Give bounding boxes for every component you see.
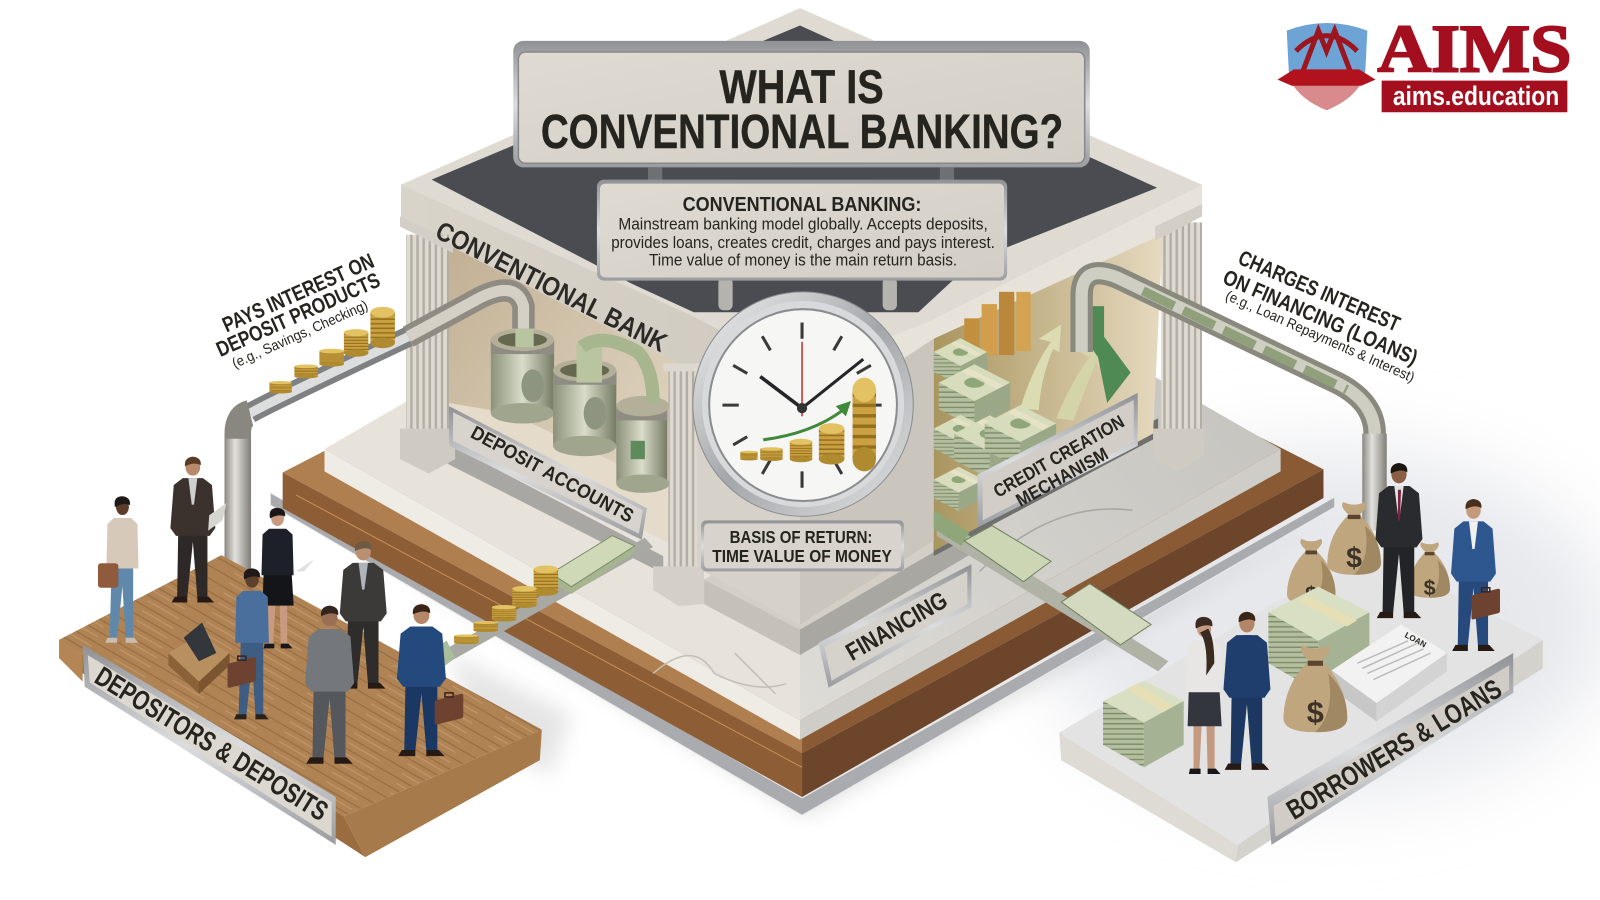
label: conventional bank: CONVENTIONAL BANK xyxy=(431,215,672,358)
title sign: CONVENTIONAL BANKING? xyxy=(541,106,1063,159)
definition sign: provides loans, creates credit, charges and pays interest. xyxy=(611,233,995,252)
clock hands xyxy=(760,342,863,416)
man with burgundy tie xyxy=(1376,463,1422,618)
sign: depositors and deposits xyxy=(83,645,336,845)
caption: pays interest on deposits: (e.g., Savings, Checking) xyxy=(230,298,371,372)
green growth arrow xyxy=(763,401,851,440)
pipe: interest charged on loans xyxy=(1082,273,1387,531)
loan document stack: LOAN xyxy=(1403,631,1428,649)
right conveyor with bills xyxy=(934,510,1168,671)
column right xyxy=(1153,204,1204,471)
growing coin stacks xyxy=(740,378,876,471)
people: borrower pair at back xyxy=(1376,463,1500,651)
definition sign xyxy=(597,180,1007,281)
logo shield xyxy=(1278,23,1376,110)
caption: pays interest on deposits: DEPOSIT PRODUCTS xyxy=(213,268,384,362)
woman with ponytail xyxy=(1186,617,1222,774)
small cash stack xyxy=(1103,681,1184,767)
sign: deposit accounts: DEPOSIT ACCOUNTS xyxy=(467,422,637,528)
money bag in front xyxy=(1283,645,1347,732)
woman in black suit xyxy=(261,508,314,648)
money bags: $ xyxy=(1305,582,1318,607)
sign: financing xyxy=(818,564,971,688)
large cash stack xyxy=(1268,587,1369,692)
people: borrower pair in front xyxy=(1186,612,1270,774)
man with blue suit and case xyxy=(1451,499,1500,651)
right room interior xyxy=(934,222,1163,551)
platform: layered bank base xyxy=(270,173,1335,815)
sign: credit creation mechanism xyxy=(978,393,1138,528)
man in charcoal suit xyxy=(340,541,387,689)
pipe: interest paid to depositors xyxy=(220,290,523,585)
money bags xyxy=(1287,502,1450,607)
platform: depositors wood block xyxy=(59,555,542,857)
sign: basis of return xyxy=(701,520,904,571)
sign: borrowers and loans xyxy=(1267,653,1513,845)
entablature band right xyxy=(800,185,1202,427)
money bags: $ xyxy=(1424,576,1436,600)
logo: AIMS: aims.education xyxy=(1393,81,1559,111)
column centre xyxy=(653,363,704,606)
man in blue suit with case xyxy=(397,604,463,756)
definition sign: Mainstream banking model globally. Accepts deposits, xyxy=(618,215,988,234)
title sign xyxy=(513,41,1090,167)
people: depositors xyxy=(98,457,463,764)
definition sign: CONVENTIONAL BANKING: xyxy=(683,194,921,216)
coin stacks on left pipe xyxy=(269,307,395,393)
left conveyor with bills and coins xyxy=(436,536,653,670)
title sign: WHAT IS xyxy=(719,61,884,113)
clock xyxy=(693,292,913,516)
left room interior xyxy=(434,237,684,543)
caption: charges interest on loans: ON FINANCING (LOANS) xyxy=(1219,265,1421,370)
building: bank stone walls xyxy=(400,8,1204,655)
man in navy suit xyxy=(1223,612,1270,770)
definition sign: Time value of money is the main return basis. xyxy=(649,250,957,269)
money jars in deposit room xyxy=(491,316,669,493)
cash register xyxy=(168,622,230,694)
caption: charges interest on loans: CHARGES INTEREST xyxy=(1235,246,1404,336)
sign: basis of return: BASIS OF RETURN: xyxy=(730,527,872,547)
caption: pays interest on deposits: PAYS INTEREST ON xyxy=(219,249,378,337)
dark roof deck xyxy=(432,26,1157,312)
sign: credit creation mechanism: MECHANISM xyxy=(1012,443,1112,511)
central pier xyxy=(697,339,934,624)
main plinth shadow xyxy=(306,510,1327,816)
soft grey floor glow xyxy=(1041,449,1600,796)
sign: credit creation mechanism: CREDIT CREATION xyxy=(990,411,1128,501)
caption: charges interest on loans: (e.g., Loan Repayments & Interest) xyxy=(1223,288,1417,386)
logo: AIMS xyxy=(1278,11,1571,112)
entablature band left xyxy=(401,185,800,427)
logo: AIMS: AIMS xyxy=(1378,11,1571,86)
money bags: $ xyxy=(1346,542,1362,574)
depositor block shadow xyxy=(449,653,571,776)
loan document stack xyxy=(1332,624,1447,721)
gold bars in credit room xyxy=(964,292,1031,355)
sign: financing: FINANCING xyxy=(842,587,952,666)
column left xyxy=(400,216,455,473)
roof parapet xyxy=(401,8,1202,427)
clock ticks xyxy=(722,322,882,488)
woman in blue suit xyxy=(228,568,269,719)
man with papers xyxy=(170,457,227,603)
sign supports xyxy=(648,167,954,310)
money bag in front: $ xyxy=(1307,695,1324,729)
sign: borrowers and loans: BORROWERS & LOANS xyxy=(1281,673,1507,826)
platform: borrowers marble block xyxy=(1059,556,1543,862)
sign: basis of return: TIME VALUE OF MONEY xyxy=(712,546,892,566)
woman with handbag xyxy=(98,496,139,643)
sign: depositors and deposits: DEPOSITORS & DEPOSITS xyxy=(90,660,334,827)
man in grey suit xyxy=(305,606,354,764)
cash stacks and rising bills in credit room xyxy=(934,306,1131,511)
